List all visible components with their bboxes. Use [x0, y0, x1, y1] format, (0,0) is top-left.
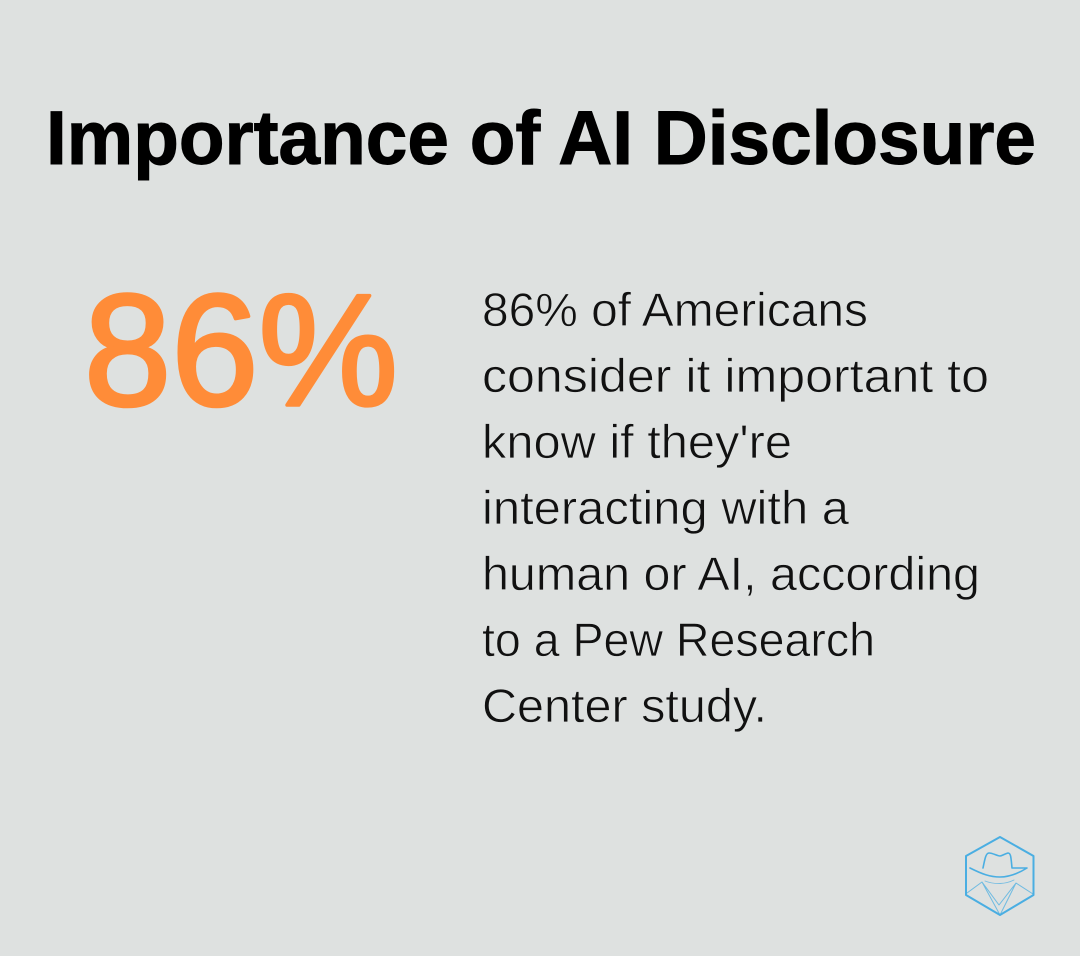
icon: hexagon outline — [966, 837, 1034, 915]
description text block: know if they're — [482, 415, 792, 468]
icon: lower brim — [985, 880, 1014, 884]
description text block: interacting with a — [482, 481, 850, 534]
description text block: consider it important to — [482, 349, 989, 402]
description text block: Center study. — [482, 679, 767, 732]
icon: suit collar — [967, 882, 1033, 915]
description text block — [482, 283, 989, 732]
description text block: 86% of Americans — [482, 283, 868, 336]
icon: hexagon logo with hat-wearing agent — [966, 837, 1034, 915]
icon: hat — [970, 853, 1027, 877]
description text block: human or AI, according — [482, 547, 980, 600]
description text block: to a Pew Research — [482, 613, 875, 666]
title: Importance of AI Disclosure — [46, 96, 1036, 181]
big statistic: 86%: 86% — [84, 261, 398, 439]
